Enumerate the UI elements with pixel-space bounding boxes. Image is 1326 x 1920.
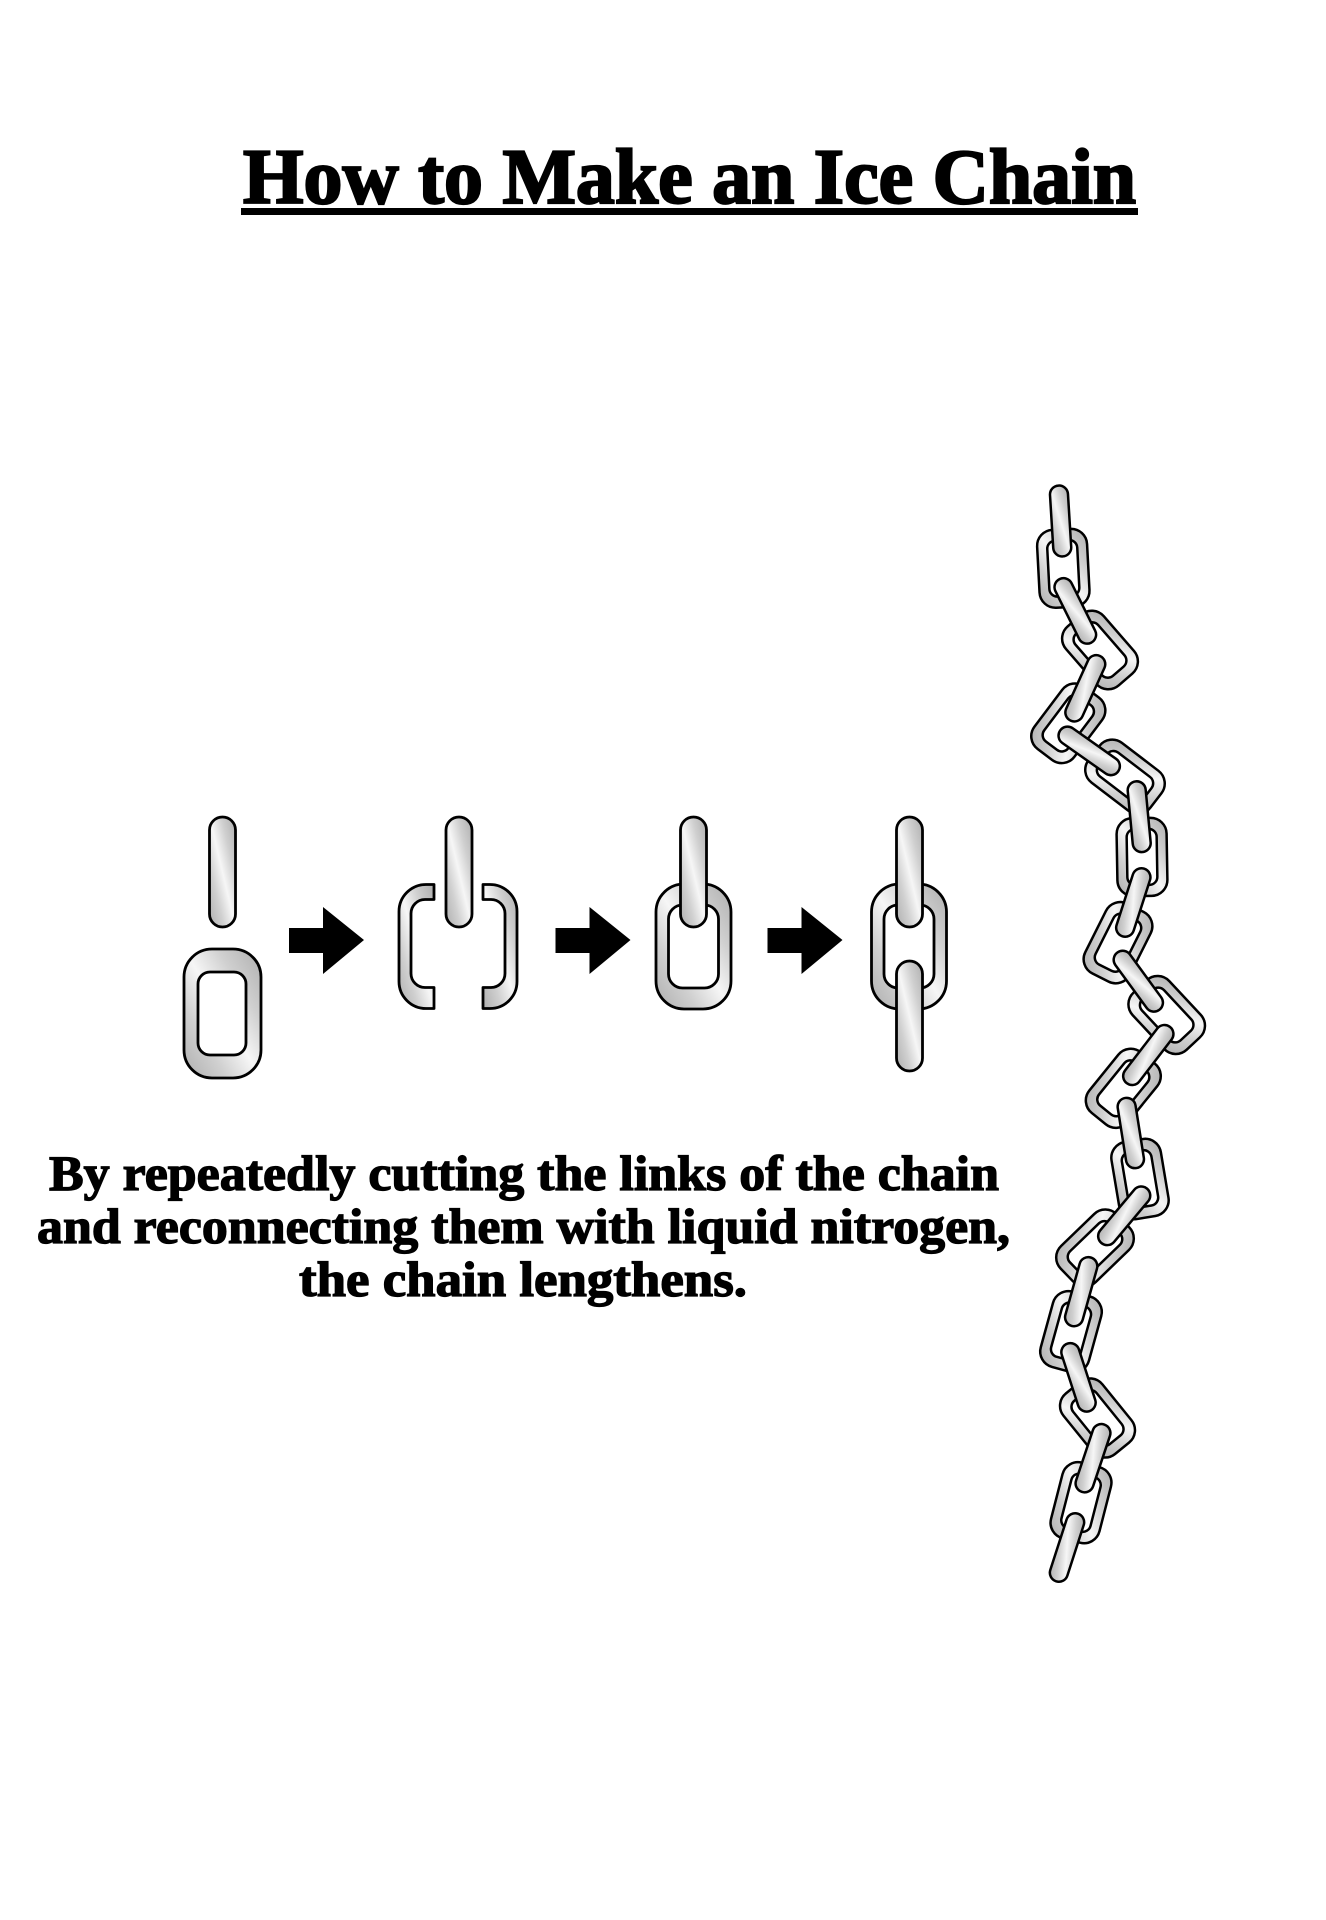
title: How to Make an Ice Chain (243, 133, 1136, 220)
explanation text: and reconnecting them with liquid nitrogen, (37, 1198, 1010, 1254)
step 1: bar above closed link (184, 817, 261, 1078)
step 4: link joined to two bars (872, 817, 946, 1071)
explanation text: By repeatedly cutting the links of the chain (49, 1145, 999, 1201)
step 2: cut link with bar inserted (399, 817, 517, 1008)
arrow 1 (289, 907, 364, 974)
explanation text (37, 1145, 1010, 1307)
arrow 2 (556, 907, 630, 974)
explanation text: the chain lengthens. (299, 1251, 747, 1307)
arrow 3 (768, 907, 842, 974)
long ice chain (1025, 485, 1212, 1584)
step 3: rejoined link with bar (656, 817, 731, 1009)
